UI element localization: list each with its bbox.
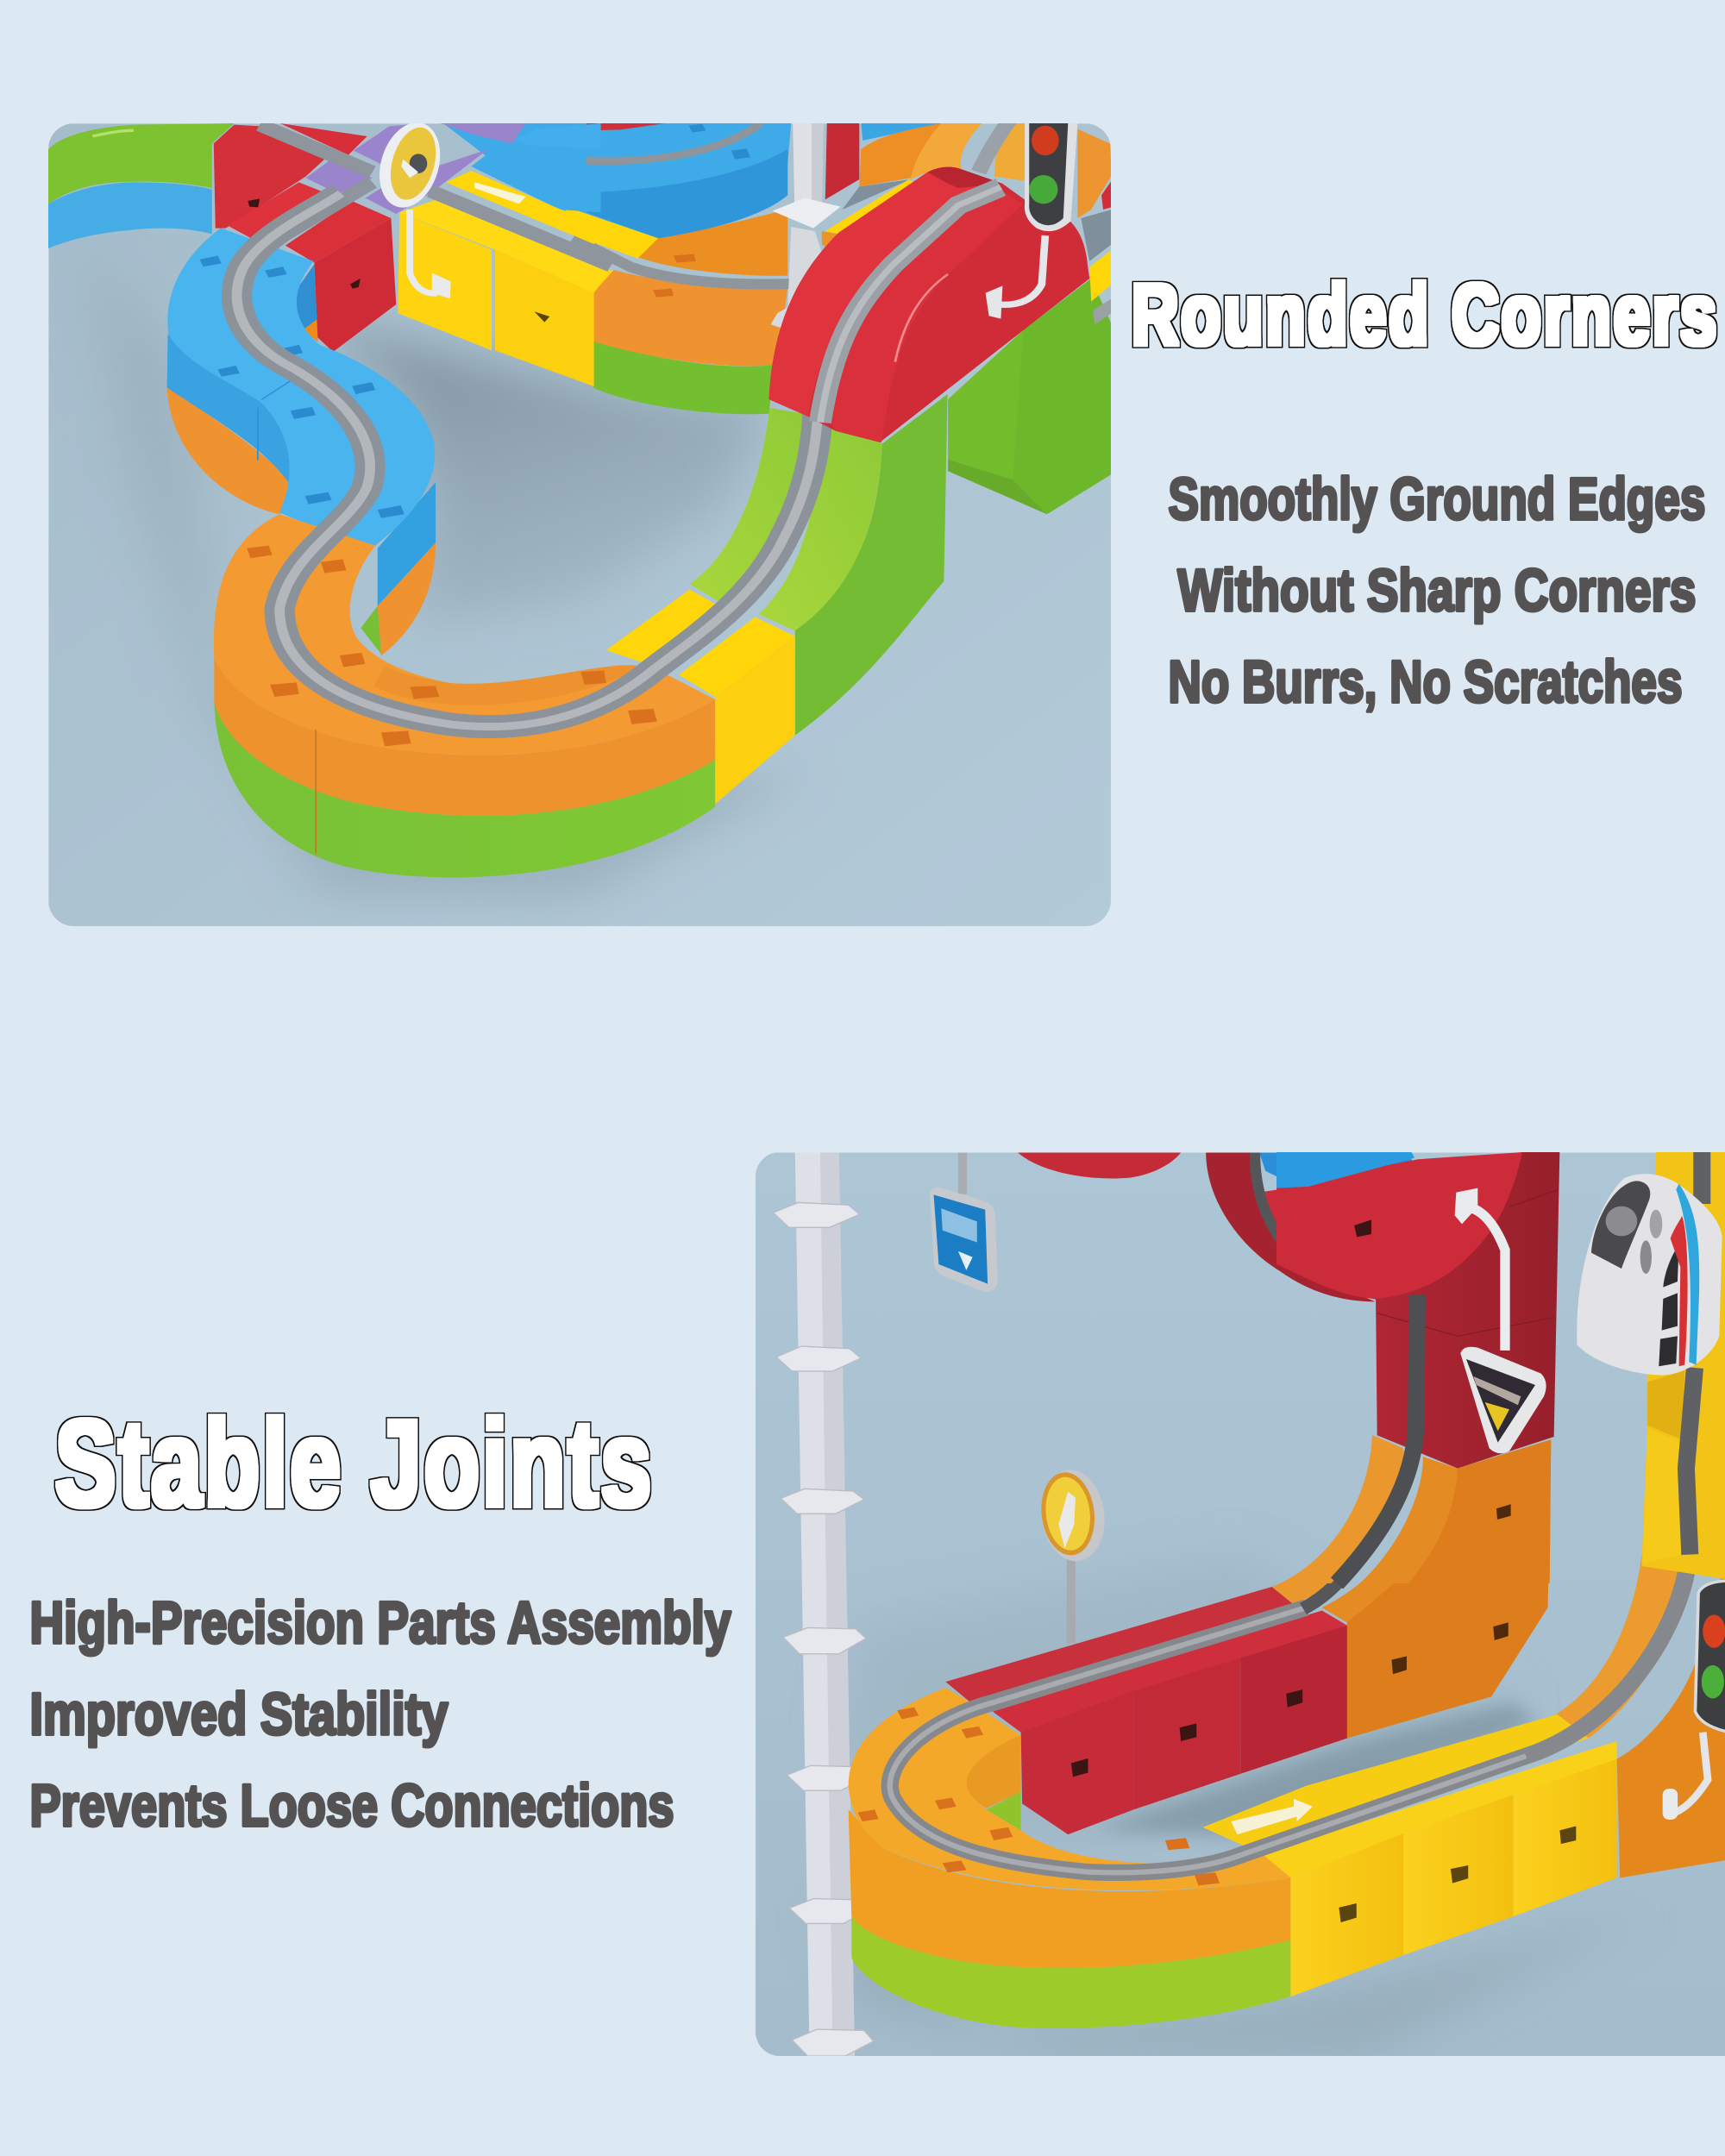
- highlight on green band: [92, 130, 134, 136]
- green rising section: [690, 394, 948, 736]
- blue curved section: [443, 123, 791, 238]
- yellow rail pieces: [566, 207, 658, 293]
- yellow socket: [534, 311, 549, 323]
- blue top right: [471, 151, 601, 212]
- red round face: [1276, 1152, 1522, 1299]
- floor gap and yellow rail: [843, 179, 911, 210]
- red curved top left: [1206, 1153, 1432, 1303]
- blue inner pocket: [292, 264, 317, 337]
- hook and plate: [410, 210, 451, 298]
- elbow sockets: [1391, 1504, 1512, 1674]
- panel: rounded corners track photo: [48, 118, 1113, 926]
- bridge track: [820, 187, 1000, 423]
- track in orange curve: [573, 238, 791, 284]
- yellow straight blocks: [606, 590, 795, 804]
- traffic light: [1025, 123, 1077, 231]
- panel floor: [48, 123, 1111, 926]
- red overhead piece: [1018, 1153, 1181, 1178]
- orange and green U-bend: [214, 514, 715, 877]
- green lower block: [593, 342, 774, 414]
- train: [1577, 1174, 1722, 1375]
- red tower seams: [1377, 1189, 1559, 1336]
- grey rail track: [237, 193, 819, 727]
- triangular warning sign: [1460, 1347, 1546, 1453]
- sign: blue rectangle: [930, 1153, 998, 1292]
- right green block: [948, 279, 1112, 514]
- blue studs: [199, 255, 405, 518]
- yellow front faces: [398, 212, 492, 350]
- orange back arc: [859, 123, 941, 186]
- benefit line 1: High-Precision Parts Assembly: [29, 1589, 731, 1656]
- right edge pieces: [1077, 129, 1113, 324]
- pole flanges: [773, 1202, 874, 2056]
- text block: rounded corners benefits: [1168, 466, 1706, 715]
- purple cross connectors: [306, 123, 526, 214]
- rear track: [979, 121, 1009, 172]
- white arrow label: [474, 182, 526, 204]
- orange and green U-bend: [849, 1688, 1290, 2028]
- blue band: [48, 182, 212, 248]
- red block sockets: [1071, 1689, 1302, 1777]
- red right block: [314, 218, 396, 352]
- blue S-curve track section: [167, 229, 436, 655]
- light orange band: [911, 123, 982, 179]
- benefit line 3: Prevents Loose Connections: [29, 1772, 674, 1839]
- panel: stable joints track photo: [756, 1152, 1725, 2056]
- tower right track: [1686, 1152, 1702, 1555]
- red lower rail: [228, 182, 321, 238]
- right orange curve: [1539, 1554, 1725, 1877]
- orange inner curve: [637, 210, 787, 276]
- red right block socket: [350, 279, 361, 289]
- bridge body: [769, 167, 1089, 442]
- green band: [48, 123, 234, 204]
- orange studs: [653, 254, 696, 298]
- orange elbow: [1272, 1435, 1551, 1739]
- panel floor: [756, 1153, 1725, 2056]
- benefit line 2: Improved Stability: [29, 1681, 448, 1747]
- red left block: [214, 125, 324, 229]
- yellow tower right: [1641, 1152, 1725, 1583]
- orange elbow upper: [1294, 1435, 1403, 1583]
- orange studs: [247, 546, 657, 746]
- blue sliver behind arc: [861, 123, 943, 141]
- street pole: [771, 123, 841, 330]
- text block: stable joints benefits: [29, 1589, 731, 1839]
- back section: blue curve, orange arcs, pole, right block: [443, 121, 1113, 514]
- orange outer block: [593, 270, 787, 366]
- traffic light and hook at right edge: [1663, 1581, 1725, 1820]
- sign: round yellow on pole: [1037, 1467, 1109, 1643]
- street pole with flanges: [773, 1153, 874, 2056]
- red upper rail: [280, 123, 367, 155]
- dark red column: [825, 123, 859, 199]
- main track sections: [167, 193, 948, 877]
- right upper section: red tower, triangle sign, train: [1276, 1152, 1725, 1583]
- red raised bridge with traffic light: [769, 123, 1089, 442]
- hook: [986, 235, 1045, 319]
- track on curved top: [1255, 1153, 1303, 1266]
- track diagonals: [260, 125, 611, 266]
- back-left section: band, red junction, purple cross, yellow blocks: [48, 118, 611, 386]
- dark red tower: [1376, 1152, 1559, 1469]
- yellow straight blocks: [1203, 1714, 1617, 1996]
- tower track: [1337, 1294, 1417, 1583]
- red left block socket: [248, 198, 260, 207]
- grey rail track: [890, 1554, 1689, 1872]
- white hook: [1455, 1188, 1505, 1351]
- orange pocket: [303, 319, 317, 342]
- red straight blocks: [945, 1587, 1347, 1834]
- yellow block sockets: [1339, 1827, 1576, 1922]
- white arrow label: [1231, 1799, 1313, 1834]
- red face socket: [1354, 1219, 1371, 1237]
- bridge top lip: [927, 167, 1002, 188]
- orange studs: [858, 1708, 1220, 1885]
- round sign on track: [371, 118, 448, 212]
- heading: Stable Joints: Stable Joints: [55, 1395, 654, 1532]
- bridge highlight: [895, 274, 948, 362]
- yellow upper rail: [446, 171, 607, 244]
- bridge left rail: [769, 167, 999, 417]
- bridge right rail: [825, 190, 1023, 442]
- blue top: [1276, 1152, 1414, 1188]
- elbow upper socket: [1496, 1504, 1511, 1520]
